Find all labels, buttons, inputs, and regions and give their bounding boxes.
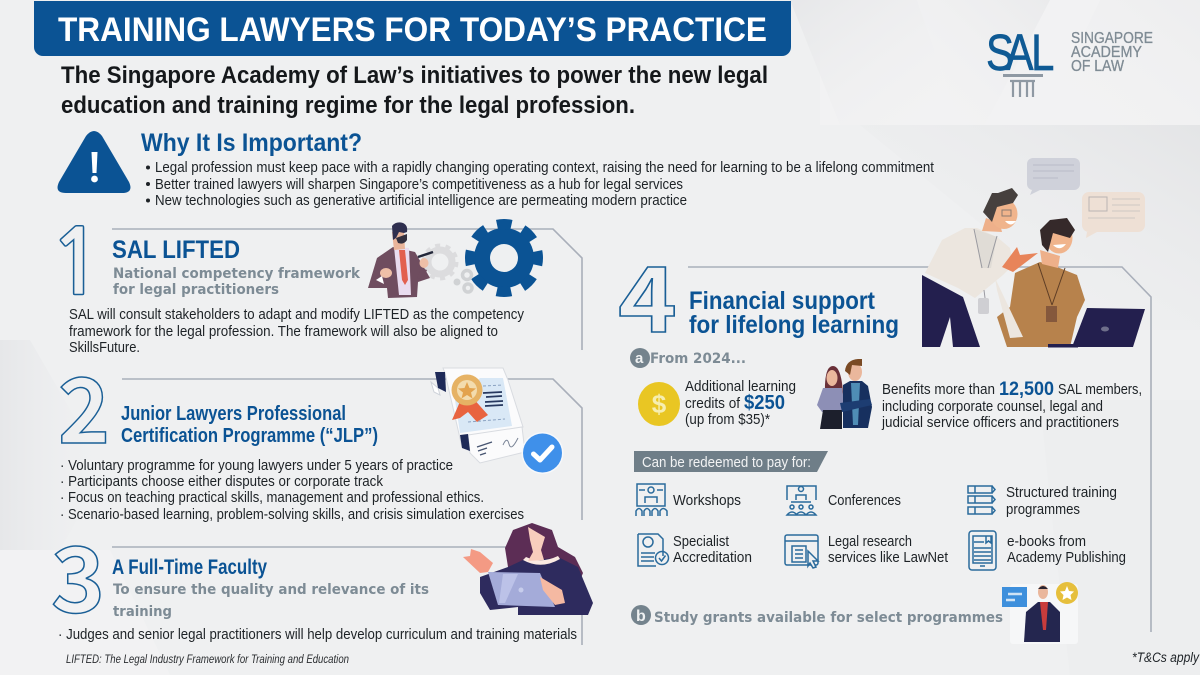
panel: why it is important: Why It Is Important? (141, 129, 362, 157)
item: legal research services (785, 533, 949, 568)
icon: blue gear (470, 224, 538, 292)
badge b: study grants: Study grants available for select programmes (654, 610, 1003, 626)
badge b: study grants (631, 605, 1003, 626)
text: benefits 12,500 members (881, 379, 1142, 431)
panel 1: SAL LIFTED (48, 219, 582, 356)
panel 2: Junior Lawyers Professional Certification Programme (58, 339, 582, 523)
footnote: LIFTED definition: LIFTED: The Legal Industry Framework for Training and Education (66, 654, 349, 666)
logo: Singapore Academy of Law: L (1031, 24, 1054, 81)
tag: can be redeemed to pay for: Can be redeemed to pay for: (642, 455, 811, 471)
panel 3: A Full-Time Faculty: A Full-Time Faculty (112, 555, 267, 579)
item: conferences (787, 486, 901, 515)
illustration: two legal professionals (817, 359, 872, 429)
panel 4: financial support for lifelong learning: Financial support (689, 287, 876, 315)
logo: Singapore Academy of Law: S (986, 24, 1014, 81)
panel 3: A Full-Time Faculty: · Judges and senior legal practitioners will help develop curriculum and training materials (58, 626, 577, 643)
icon: blue check badge (522, 432, 564, 474)
item: specialist accreditation: Specialist (673, 533, 730, 550)
item: specialist accreditation (638, 533, 752, 566)
panel 2: Junior Lawyers Professional Certification Programme: 2 (58, 339, 110, 469)
title banner (34, 1, 791, 56)
item: structured training programmes: programmes (1006, 501, 1080, 518)
subtitle: The Singapore Academy of Law’s initiatives to power the new legal (61, 62, 768, 89)
illustration: woman with tablet (463, 523, 593, 615)
text: additional learning credits: $250 (744, 392, 785, 414)
subtitle (61, 62, 768, 119)
subtitle: education and training regime for the legal profession. (61, 92, 635, 119)
panel 1: SAL LIFTED: 1 (48, 219, 104, 308)
logo: Singapore Academy of Law: OF LAW (1071, 58, 1124, 75)
panel 3: A Full-Time Faculty: 3 (51, 508, 105, 638)
text: additional learning credits: Additional learning (685, 378, 796, 395)
text: benefits 12,500 members: including corporate counsel, legal and (882, 398, 1103, 415)
item: e-books (969, 531, 1126, 570)
logo: Singapore Academy of Law (986, 24, 1153, 97)
item: workshops (636, 484, 741, 516)
icon: warning triangle (58, 131, 130, 193)
text: benefits 12,500 members: judicial service officers and practitioners (881, 414, 1119, 431)
item: e-books: e-books from (1007, 533, 1086, 550)
panel 1: SAL LIFTED: SAL LIFTED (112, 236, 240, 264)
item: specialist accreditation: Accreditation (673, 549, 752, 566)
logo: Singapore Academy of Law: A (1006, 24, 1034, 81)
logo: Singapore Academy of Law: ACADEMY (1071, 44, 1142, 61)
panel 2: Junior Lawyers Professional Certification Programme: · Voluntary programme for young lawyers under 5 years of practice (60, 457, 453, 474)
icon: certificate scroll (431, 368, 525, 463)
panel 1: SAL LIFTED: SkillsFuture. (69, 339, 140, 356)
panel 1: SAL LIFTED: framework for the legal profession. The framework will also be aligned to (69, 323, 498, 340)
item: conferences: Conferences (828, 492, 901, 509)
panel 4: financial support for lifelong learning: 4 (618, 228, 677, 358)
item: legal research services: Legal research (828, 533, 912, 550)
panel 2: Junior Lawyers Professional Certification Programme: · Participants choose either disputes or corporate track (60, 473, 383, 490)
panel 2: Junior Lawyers Professional Certification Programme: Certification Programme (“JLP”) (121, 425, 378, 447)
panel 3: A Full-Time Faculty: training (113, 604, 172, 620)
badge a: from 2024 (630, 348, 746, 368)
panel 4: financial support for lifelong learning (618, 158, 1151, 644)
item: workshops: Workshops (673, 492, 741, 509)
panel 2: Junior Lawyers Professional Certification Programme: Junior Lawyers Professional (121, 403, 346, 425)
text: additional learning credits (685, 378, 796, 428)
panel: why it is important: Better trained lawyers will sharpen Singapore’s competitiveness as a hub for legal services (155, 176, 683, 193)
text: benefits 12,500 members: SAL members, (1058, 381, 1142, 398)
text: additional learning credits: (up from $35)* (685, 411, 770, 428)
illustration: two colleagues at laptop (922, 158, 1145, 348)
panel 3: A Full-Time Faculty: To ensure the quality and relevance of its (113, 582, 429, 598)
panel 1: SAL LIFTED: National competency framework (113, 266, 361, 282)
illustration: businessman with pen (368, 222, 433, 298)
text: benefits 12,500 members: Benefits more than (882, 381, 995, 398)
item: legal research services: services like LawNet (828, 549, 949, 566)
panel: why it is important (141, 129, 935, 209)
item: structured training programmes (968, 484, 1117, 518)
panel: why it is important: New technologies such as generative artificial intelligence are permeating modern practice (155, 192, 687, 209)
illustration: presenter with card and star (1002, 582, 1078, 644)
badge a: from 2024: a (635, 350, 644, 367)
icon: gold dollar coin (638, 382, 680, 426)
item: structured training programmes: Structured training (1006, 484, 1117, 501)
panel 1: SAL LIFTED: for legal practitioners (113, 282, 279, 298)
panel: why it is important: Legal profession must keep pace with a rapidly changing operating context, raising the need for learning to be a lifelong commitment (155, 159, 935, 176)
panel 2: Junior Lawyers Professional Certification Programme: · Focus on teaching practical skills, management and professional ethics. (60, 489, 484, 506)
panel 1: SAL LIFTED: SAL will consult stakeholders to adapt and modify LIFTED as the competency (69, 306, 524, 323)
item: e-books: Academy Publishing (1007, 549, 1126, 566)
badge a: from 2024: From 2024... (650, 351, 746, 367)
panel 3: A Full-Time Faculty (51, 508, 593, 645)
text: benefits 12,500 members: 12,500 (999, 379, 1054, 400)
icon: grey gears (424, 246, 472, 292)
panel 2: Junior Lawyers Professional Certification Programme: · Scenario-based learning, problem-solving skills, and crisis simulation exercises (60, 506, 524, 523)
icon: gold dollar coin: $ (652, 389, 667, 419)
title banner: TRAINING LAWYERS FOR TODAY’S PRACTICE (58, 11, 767, 49)
logo: Singapore Academy of Law: SINGAPORE (1071, 30, 1153, 47)
panel 4: financial support for lifelong learning: for lifelong learning (689, 311, 899, 339)
badge b: study grants: b (636, 608, 646, 625)
text: additional learning credits: credits of (685, 395, 741, 412)
